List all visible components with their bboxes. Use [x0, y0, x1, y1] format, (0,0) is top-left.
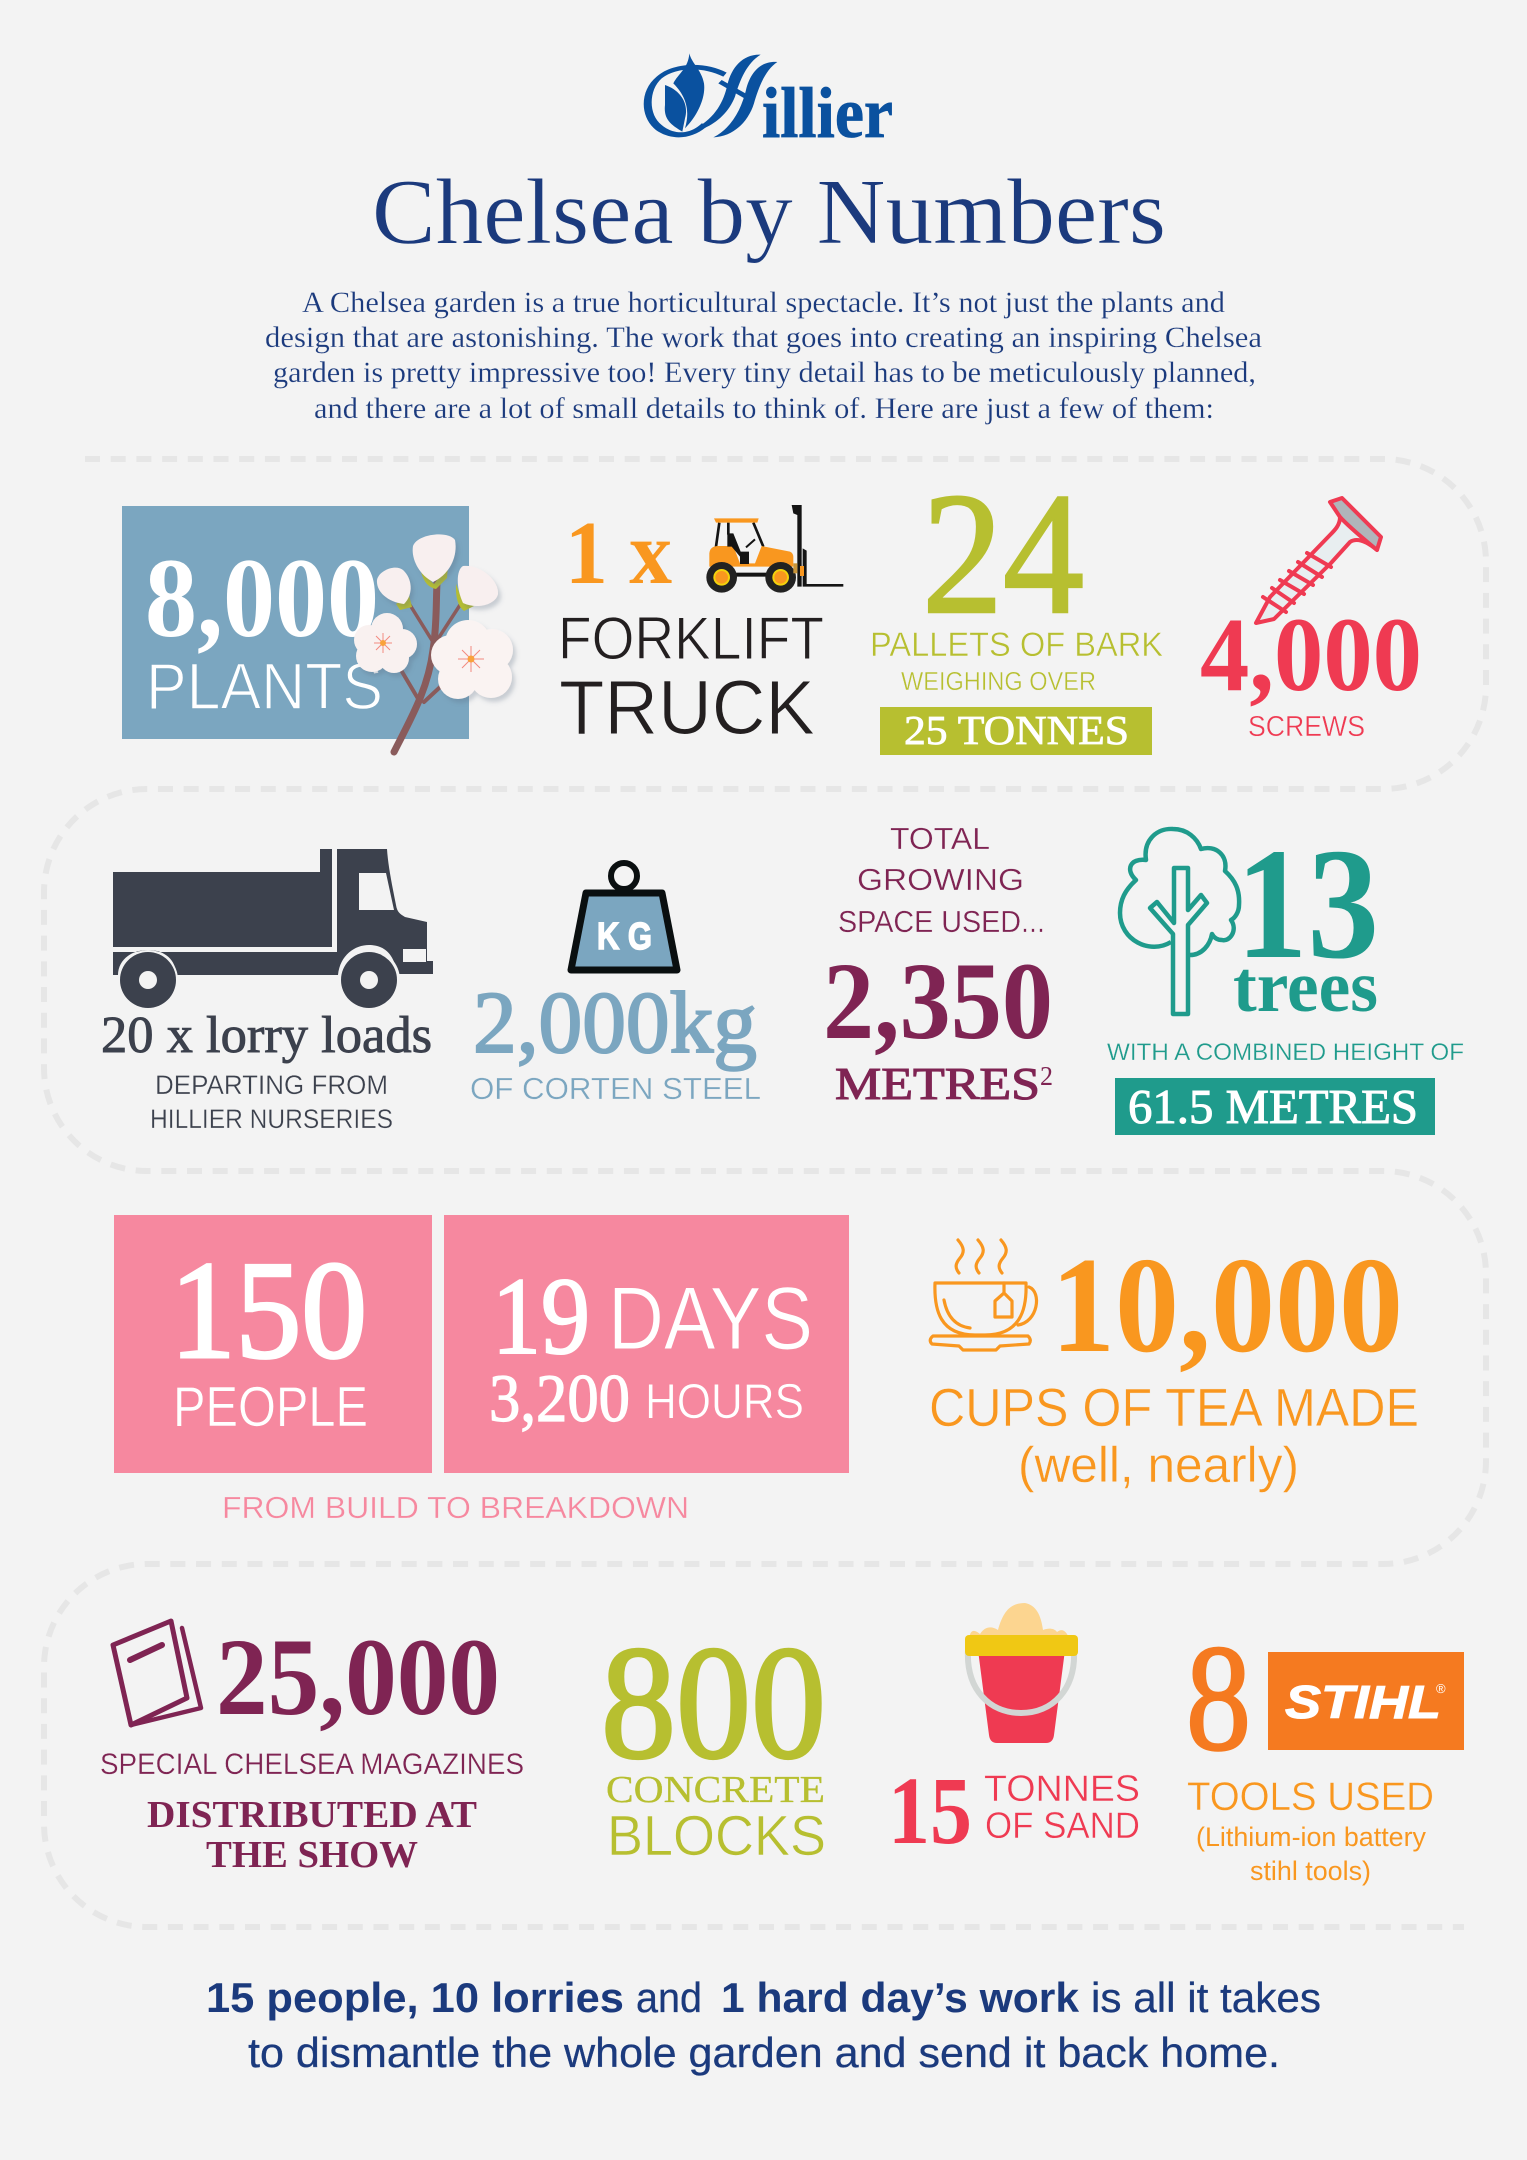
footer text — [206, 1974, 1321, 2076]
stat: 19 days, 3,200 hours — [444, 1215, 849, 1473]
footer text: is all it takes — [1091, 1974, 1321, 2021]
stat: 8 stihl tools: 8 — [1186, 1614, 1251, 1782]
stat: 4,000 screws: 4,000 — [1200, 596, 1422, 713]
panel: row 4 — [100, 1603, 1464, 1886]
stat: 25,000 magazines: SPECIAL CHELSEA MAGAZINES — [100, 1748, 524, 1781]
stat: 800 concrete blocks: CONCRETE — [606, 1769, 825, 1811]
icon: blossom branch — [354, 534, 513, 752]
stat: 8,000 plants: 8,000 — [145, 536, 379, 661]
stat: 24 pallets of bark: 25 TONNES — [904, 707, 1129, 753]
stat: 20 x lorry loads — [101, 1007, 432, 1134]
icon: lorry — [113, 849, 433, 1011]
stat: 150 people — [114, 1215, 432, 1473]
stat: 2,350 metres squared: TOTAL — [890, 821, 990, 856]
logo: Hillier: illier — [762, 73, 893, 153]
stat: 10,000 cups of tea — [929, 1229, 1419, 1493]
stat: 8 stihl tools: TOOLS USED — [1187, 1775, 1434, 1819]
stat: 150 people: 150 — [170, 1233, 367, 1388]
footer text: 1 hard day’s work — [721, 1974, 1080, 2021]
icon: KG weight — [571, 863, 677, 970]
stat: 8 stihl tools: STIHL — [1285, 1676, 1441, 1728]
icon: KG weight: K G — [597, 916, 652, 958]
stat: 24 pallets of bark: WEIGHING OVER — [901, 666, 1096, 696]
stat: 1 x forklift truck: TRUCK — [559, 665, 815, 751]
stat: 800 concrete blocks — [601, 1614, 826, 1868]
stat: 19 days, 3,200 hours: 3,200 — [489, 1360, 630, 1436]
stat: 10,000 cups of tea: CUPS OF TEA MADE — [929, 1378, 1419, 1438]
stat: 8 stihl tools: (Lithium-ion battery — [1196, 1822, 1426, 1852]
stat: 10,000 cups of tea: (well, nearly) — [1018, 1437, 1299, 1493]
stat: 13 trees: 13 — [1236, 816, 1379, 992]
stat: 15 tonnes of sand: TONNES — [984, 1768, 1140, 1809]
stat: 2,350 metres squared: 2 — [1040, 1061, 1053, 1091]
stat: 24 pallets of bark — [870, 457, 1163, 755]
icon: screw — [1256, 498, 1381, 623]
icon: tree — [1120, 829, 1239, 1014]
icon: bucket of sand — [965, 1603, 1078, 1743]
stat: 20 x lorry loads: HILLIER NURSERIES — [150, 1104, 393, 1134]
stat: 8,000 plants — [122, 506, 469, 739]
stat: 2,350 metres squared: SPACE USED... — [838, 904, 1045, 939]
footer text: and — [636, 1974, 702, 2021]
stat: 2,350 metres squared — [823, 821, 1053, 1109]
panel: row 2 — [101, 816, 1464, 1135]
stat: 13 trees: 61.5 METRES — [1128, 1079, 1418, 1134]
stat: 13 trees — [1107, 816, 1464, 1135]
stat: 25,000 magazines: DISTRIBUTED AT — [147, 1794, 477, 1836]
stat: 15 tonnes of sand — [888, 1757, 1140, 1864]
stat: 2,350 metres squared: 2,350 — [823, 940, 1053, 1062]
stat: 1 x forklift truck: FORKLIFT — [558, 605, 824, 672]
stat: 2,350 metres squared: METRES — [835, 1058, 1040, 1109]
caption: from build to breakdown: FROM BUILD TO BREAKDOWN — [222, 1490, 689, 1525]
stat: 19 days, 3,200 hours: 19 — [492, 1255, 590, 1377]
footer text: 15 people, 10 lorries — [206, 1974, 624, 2021]
stat: 8 stihl tools: ® — [1436, 1681, 1446, 1696]
stat: 10,000 cups of tea: 10,000 — [1051, 1229, 1403, 1381]
panel: row 3 — [114, 1215, 1419, 1525]
stat: 2,000kg of corten steel: 2,000kg — [473, 975, 757, 1072]
stat: 1 x forklift truck — [558, 504, 843, 751]
stat: 25,000 magazines: THE SHOW — [206, 1834, 418, 1876]
intro text: A Chelsea garden is a true horticultural spectacle. It’s not just the plants and — [302, 286, 1225, 319]
stat: 800 concrete blocks: 800 — [601, 1614, 826, 1793]
icon: tea cup — [930, 1240, 1037, 1350]
icon: magazines — [113, 1621, 201, 1725]
stat: 19 days, 3,200 hours: DAYS — [608, 1268, 813, 1368]
footer text: to dismantle the whole garden and send it back home. — [248, 2029, 1280, 2076]
intro text: design that are astonishing. The work that goes into creating an inspiring Chelsea — [265, 321, 1262, 354]
header — [265, 53, 1262, 425]
stat: 25,000 magazines — [100, 1616, 524, 1876]
stat: 1 x forklift truck: 1 x — [565, 504, 672, 603]
stat: 800 concrete blocks: BLOCKS — [607, 1804, 826, 1868]
stat: 15 tonnes of sand: OF SAND — [985, 1805, 1140, 1846]
stat: 20 x lorry loads: 20 x lorry loads — [101, 1007, 432, 1064]
stat: 15 tonnes of sand: 15 — [888, 1757, 972, 1864]
stat: 8 stihl tools — [1186, 1614, 1464, 1886]
stat: 13 trees: trees — [1233, 946, 1378, 1027]
stat: 24 pallets of bark: PALLETS OF BARK — [870, 626, 1163, 664]
stat: 25,000 magazines: 25,000 — [216, 1616, 500, 1738]
icon: forklift — [706, 505, 843, 593]
intro text: garden is pretty impressive too! Every tiny detail has to be meticulously planned, — [273, 356, 1256, 389]
stat: 24 pallets of bark: 24 — [922, 457, 1084, 650]
stat: 20 x lorry loads: DEPARTING FROM — [155, 1070, 388, 1100]
stat: 2,000kg of corten steel: OF CORTEN STEEL — [470, 1071, 761, 1106]
panel: row 1 — [122, 457, 1422, 755]
intro text — [265, 286, 1262, 425]
stat: 150 people: PEOPLE — [173, 1375, 368, 1439]
logo: Hillier — [644, 53, 893, 153]
title: Chelsea by Numbers — [372, 161, 1166, 264]
stat: 2,350 metres squared: GROWING — [857, 862, 1024, 897]
intro text: and there are a lot of small details to think of. Here are just a few of them: — [314, 392, 1214, 425]
stat: 8,000 plants: PLANTS — [146, 649, 383, 723]
stat: 19 days, 3,200 hours: HOURS — [645, 1375, 804, 1429]
stat: 13 trees: WITH A COMBINED HEIGHT OF — [1107, 1039, 1464, 1066]
stat: 4,000 screws: SCREWS — [1248, 711, 1365, 743]
stat: 8 stihl tools: stihl tools) — [1250, 1856, 1371, 1886]
